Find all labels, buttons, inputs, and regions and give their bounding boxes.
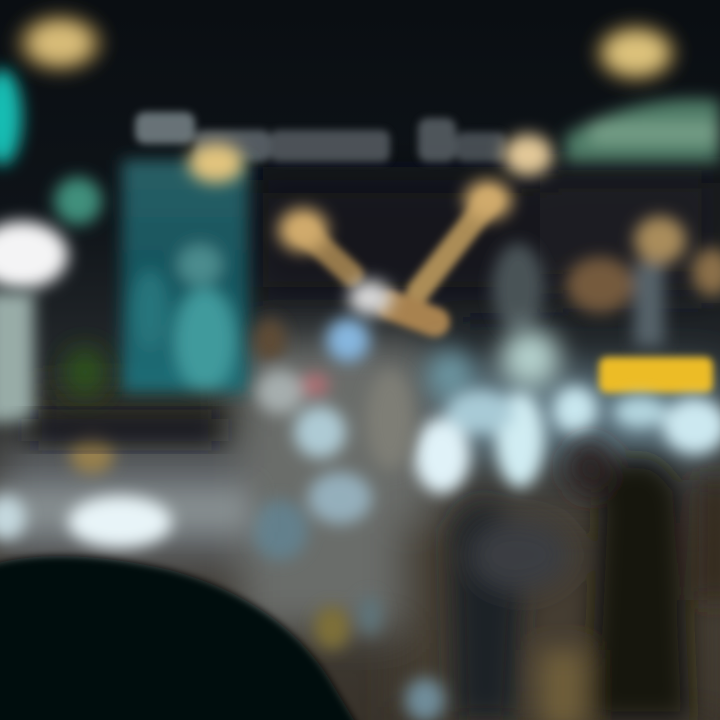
warm lights right [492, 216, 720, 347]
ceiling light right [594, 22, 678, 84]
white glow bottom left [0, 496, 172, 548]
green round sign [54, 177, 102, 225]
pale booth centre right [426, 328, 560, 401]
light counter band [0, 488, 250, 532]
white light at truss junction [348, 280, 392, 316]
ceiling light left [16, 12, 104, 74]
floor and crowd haze [0, 170, 720, 720]
warm lamp on counter [70, 435, 114, 475]
dark counter [30, 418, 220, 442]
white lamp left [0, 221, 68, 289]
teal display panel [122, 160, 248, 392]
gold Y shaped truss [305, 202, 488, 322]
gold light on panel [188, 143, 244, 183]
gold light top centre [503, 134, 553, 176]
gold truss lights [278, 180, 512, 252]
teal sign at left edge [0, 69, 22, 165]
blurred heading band [135, 112, 506, 162]
blue highlight [326, 318, 370, 362]
yellow sign [599, 357, 713, 393]
green sign top right [565, 99, 720, 162]
green plant [65, 348, 105, 396]
crowd highlights centre [252, 318, 414, 560]
warm floor glint [314, 595, 445, 720]
grey column left [0, 292, 34, 422]
bright blue-white blobs [414, 386, 720, 494]
dark foreground head bottom left [0, 556, 360, 720]
dark silhouettes right [450, 440, 720, 720]
